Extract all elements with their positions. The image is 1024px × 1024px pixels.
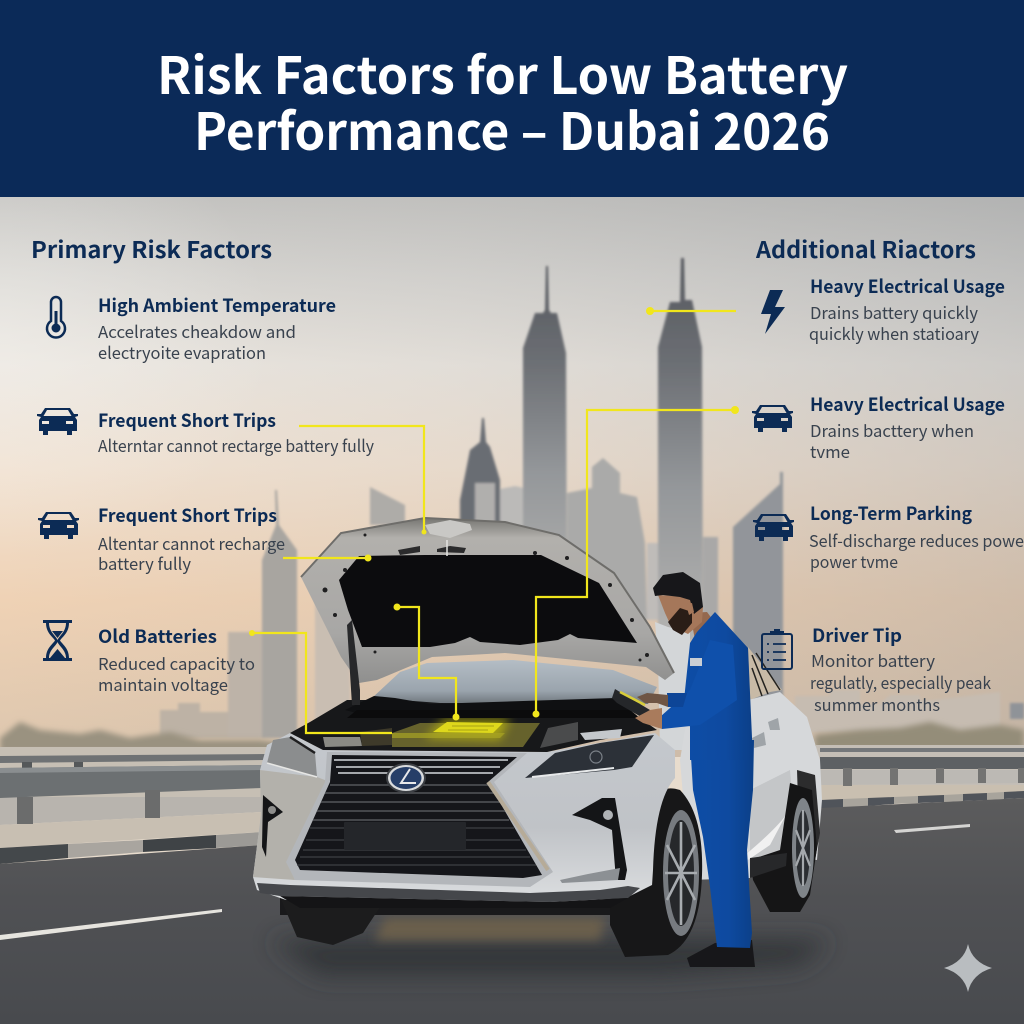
item: driver tip: summer months <box>814 692 940 716</box>
item: heavy electrical usage 1: Heavy Electrical Usage <box>810 273 1005 299</box>
lane marking left <box>0 909 222 940</box>
item: heavy electrical usage 2: tvme <box>810 439 850 463</box>
callout: old batteries <box>250 633 392 733</box>
item: frequent short trips 2 <box>38 502 285 575</box>
car <box>253 518 822 957</box>
rear wheel arch <box>797 770 820 860</box>
icon: car <box>37 408 78 435</box>
item: frequent short trips 1: Frequent Short Trips <box>98 407 276 433</box>
panel: additional factors <box>752 231 1024 716</box>
guardrails, sidewalk and curb <box>0 745 1024 864</box>
icon: clipboard <box>762 629 792 669</box>
heading: additional: Additional Riactors <box>755 231 976 265</box>
icon: car <box>752 405 793 432</box>
item: driver tip: Monitor battery <box>811 648 935 672</box>
Lexus emblem <box>386 763 426 793</box>
item: heavy electrical usage 2: Heavy Electrical Usage <box>810 391 1005 417</box>
header band <box>0 0 1024 197</box>
item: high ambient temperature: electryoite evapration <box>98 340 266 364</box>
neck <box>690 612 713 640</box>
front right wheel <box>610 788 702 957</box>
near hand <box>635 708 662 729</box>
item: long-term parking <box>753 500 1024 573</box>
left fog lamp <box>262 795 283 857</box>
heading: primary: Primary Risk Factors <box>31 231 272 265</box>
item: long-term parking: power tvme <box>810 549 898 573</box>
left headlight <box>267 737 317 777</box>
license plate <box>344 822 466 850</box>
callout: top right <box>648 310 736 312</box>
car side body <box>680 692 822 880</box>
right fog lamp <box>560 798 627 883</box>
rear wheel <box>750 783 817 912</box>
item: frequent short trips 1 <box>37 407 374 457</box>
horizon trees <box>0 722 1024 752</box>
city skyline <box>160 258 1024 738</box>
callout: hood left <box>283 557 368 559</box>
callout: battery <box>396 607 456 716</box>
icon: hourglass <box>43 620 72 661</box>
item: frequent short trips 2: Frequent Short Trips <box>98 502 277 528</box>
item: driver tip: Driver Tip <box>812 622 902 648</box>
callout dots <box>249 307 739 720</box>
car sill <box>750 853 787 878</box>
item: heavy electrical usage 1: quickly when statioary <box>809 321 979 345</box>
item: driver tip: regulatly, especially peak <box>810 670 991 694</box>
item: heavy electrical usage 2 <box>752 391 1005 463</box>
callout: heavy usage <box>536 410 736 714</box>
item: heavy electrical usage 1: Drains battery quickly <box>810 300 978 324</box>
item: old batteries: Old Batteries <box>98 623 217 649</box>
legs <box>690 740 754 948</box>
tablet <box>612 689 650 718</box>
item: high ambient temperature: Accelrates cheakdow and <box>98 319 296 343</box>
item: old batteries: maintain voltage <box>98 672 228 696</box>
title: Performance – Dubai 2026 <box>194 91 830 165</box>
mechanic <box>612 572 755 967</box>
rear window <box>748 647 782 700</box>
chrome spindle strip <box>488 782 548 870</box>
item: long-term parking: Long-Term Parking <box>810 500 972 526</box>
front left tyre <box>280 897 380 945</box>
item: heavy electrical usage 1 <box>761 273 1005 345</box>
item: heavy electrical usage 2: Drains bacttery when <box>810 418 974 442</box>
callout lines <box>250 311 736 733</box>
panel: primary risk factors <box>31 231 374 696</box>
item: frequent short trips 1: Alterntar cannot rectarge battery fully <box>98 433 374 457</box>
item: frequent short trips 2: battery fully <box>98 551 191 575</box>
icon: car <box>753 514 794 541</box>
front body <box>253 733 675 905</box>
lane marking right <box>894 824 970 833</box>
item: frequent short trips 2: Altentar cannot recharge <box>98 531 285 555</box>
engine bay <box>290 700 657 752</box>
item: high ambient temperature: High Ambient Temperature <box>98 292 336 318</box>
far hand <box>637 693 668 707</box>
item: long-term parking: Self-discharge reduces powe <box>809 528 1024 552</box>
shoes <box>687 940 755 967</box>
grille <box>286 752 553 887</box>
item: driver tip <box>762 622 991 716</box>
battery highlight <box>392 718 510 740</box>
title: Risk Factors for Low Battery <box>157 35 848 109</box>
head <box>653 572 703 635</box>
icon: car <box>38 512 79 539</box>
roof and pillars behind hood <box>655 622 690 750</box>
right headlight <box>525 735 654 778</box>
item: high ambient temperature <box>47 292 336 364</box>
hood <box>301 518 674 705</box>
lower bumper lip <box>257 883 640 902</box>
icon: thermometer <box>47 297 65 337</box>
icon: sparkle watermark <box>944 944 992 992</box>
callout: short trips <box>299 426 424 530</box>
far sleeve <box>667 693 687 707</box>
left fender tint <box>253 770 330 880</box>
undercarriage <box>280 895 640 915</box>
icon: lightning bolt <box>761 290 785 334</box>
badge <box>690 658 702 666</box>
title <box>157 35 848 165</box>
sky background <box>0 197 1024 757</box>
wheel arch <box>645 750 670 885</box>
item: old batteries <box>43 620 255 696</box>
windshield <box>372 660 657 704</box>
torso <box>684 612 753 760</box>
road <box>0 798 1024 1024</box>
item: old batteries: Reduced capacity to <box>98 651 255 675</box>
wipers and cowl <box>345 696 640 716</box>
near arm <box>660 640 737 729</box>
